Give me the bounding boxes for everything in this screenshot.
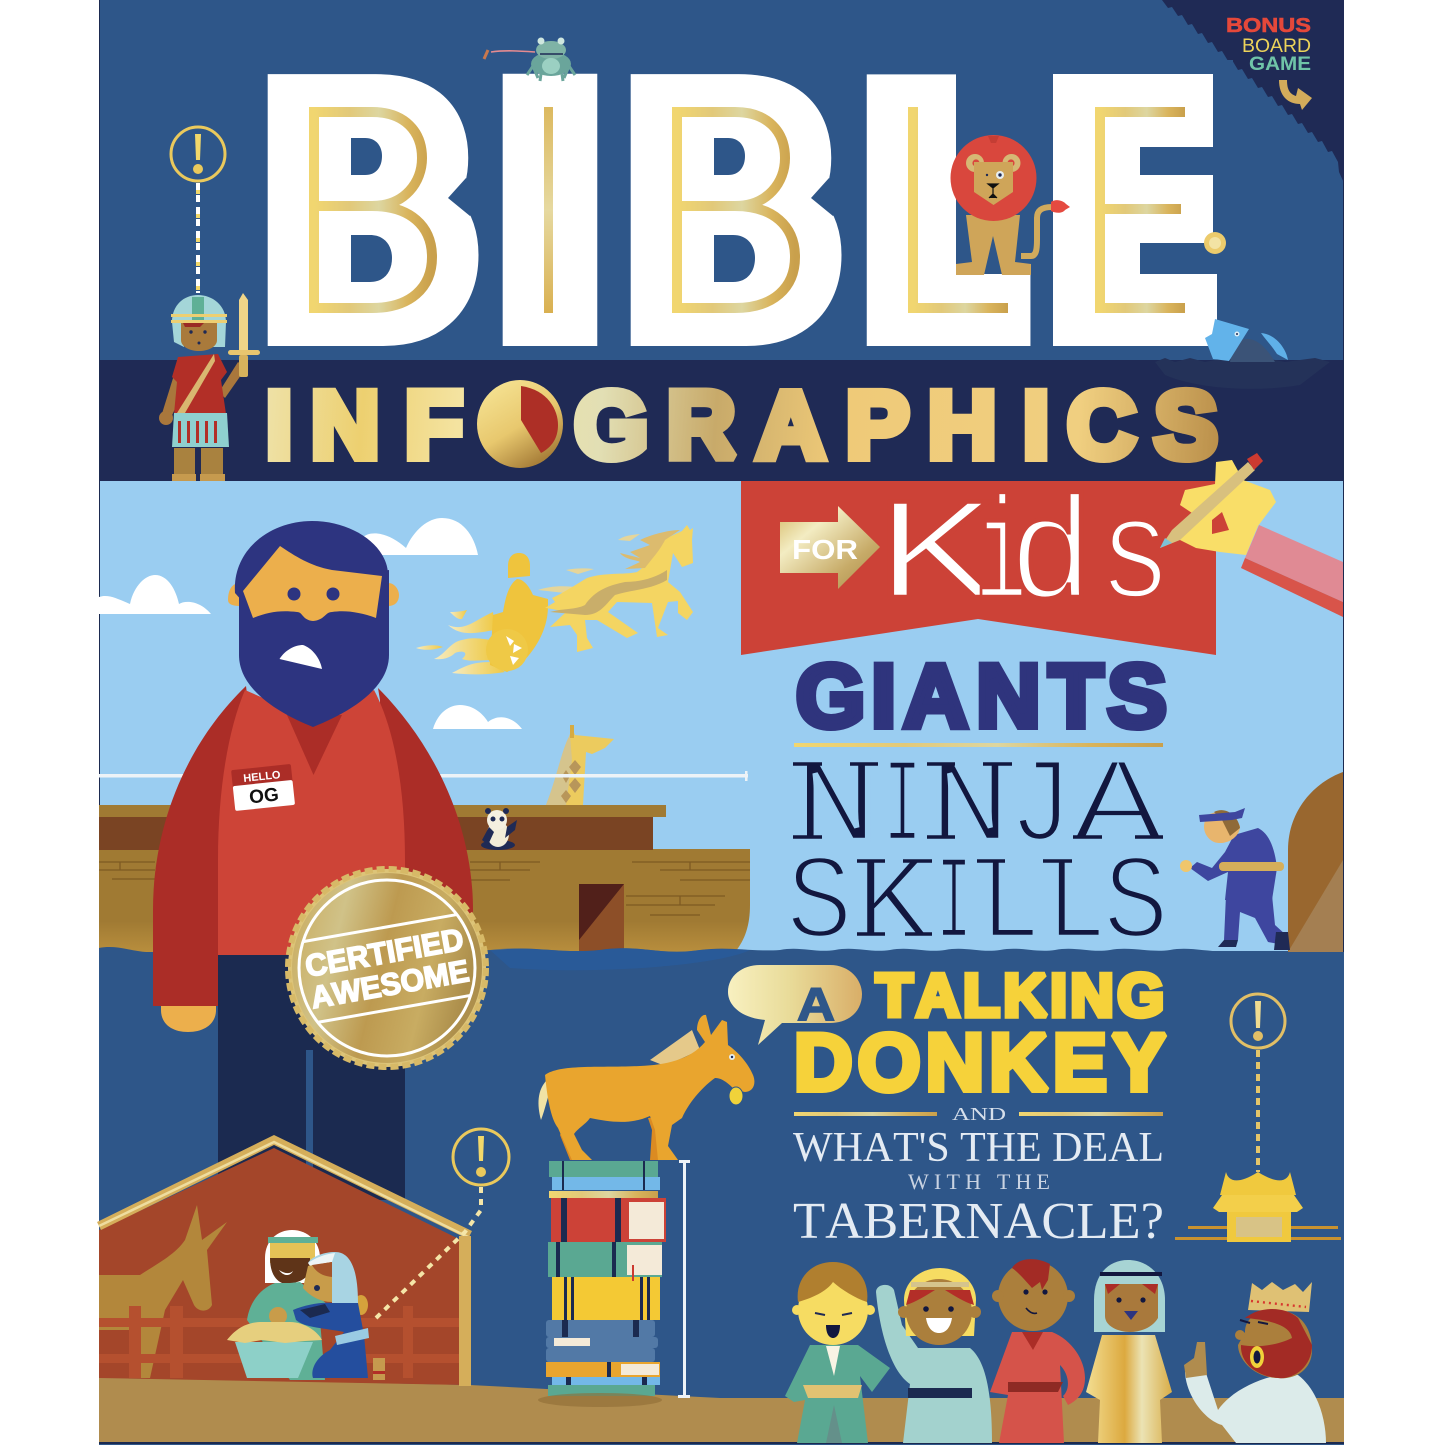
ninja running [1180,808,1290,950]
badge: certified awesome: AWESOME [308,953,472,1015]
corner flash: bonus board game: GAME [1249,54,1311,75]
clouds [99,518,522,729]
skills letters: I [936,837,972,974]
skills letters [786,837,1169,974]
ark of the covenant with alert pin [1175,994,1341,1242]
title: BIBLE: I [506,29,594,390]
skills letters: S [786,837,853,974]
text: with the: WITH THE [908,1169,1050,1194]
title: BIBLE: B [277,39,464,380]
ninja letters [793,740,1164,877]
kids wordmark: i [975,476,1027,641]
ninja letters: N [793,740,879,877]
for arrow [780,506,880,589]
skills letters: S [1103,837,1169,974]
heading: talking: TALKING [876,962,1164,1029]
ninja letters: N [928,740,1012,877]
title: BIBLE: B [640,39,827,380]
fish in water [1155,319,1330,389]
speech bubble with letter A [728,965,862,1045]
kids wordmark: d [1008,476,1094,641]
divider: gold rule [794,743,1163,747]
title: BIBLE [277,29,1204,390]
ark [99,805,750,952]
flaming chariot and horse [416,525,693,674]
name tag: hello og [231,764,295,811]
ninja letters: J [1008,740,1074,877]
title: BIBLE: L [887,62,1004,357]
subtitle: INFOGRAPHICS [266,372,1218,478]
title: BIBLE: E [1068,54,1204,365]
subtitle: INFOGRAPHICS: GRAPHICS [574,372,1218,478]
ground [99,1377,1344,1444]
text: what's the deal: WHAT'S THE DEAL [793,1125,1164,1171]
corner flash: bonus board game: BONUS [1226,15,1311,37]
character: Og the giant [153,521,473,1200]
character: gold robed kid [1086,1260,1172,1443]
height marker [678,1160,690,1398]
frog with tongue and fly [484,38,575,81]
badge: certified awesome: CERTIFIED [302,922,466,984]
character: king [1184,1282,1326,1443]
chariot flames [416,610,505,674]
skills letters: L [979,837,1041,974]
alert pin and dotted line, nativity [376,1129,509,1318]
pie chart letter O [477,380,563,468]
panda [481,808,517,850]
talking donkey [539,1015,754,1160]
subtitle: and with rules: AND [952,1104,1006,1124]
title letter counters and gaps [351,60,1233,346]
text: tabernacle: TABERNACLE? [793,1193,1164,1250]
stack of books [538,1161,666,1407]
skills letters: K [855,837,930,974]
ninja letters: A [1072,740,1164,877]
subtitle: INFOGRAPHICS: INF [266,372,463,478]
speech bubble with letter A: A [797,978,835,1030]
hand with pencil [1160,453,1343,617]
badge: certified awesome [288,869,486,1067]
name tag: hello og: OG [248,784,280,808]
stable donkey silhouette [99,1205,227,1378]
cave [1288,772,1343,952]
soldier illustration [159,293,260,481]
kids wordmark: s [1098,476,1172,641]
ninja letters: I [883,740,922,877]
kids wordmark [875,476,1172,641]
subtitle: and with rules [794,1104,1163,1124]
water [99,947,1344,1445]
character: red kid [990,1259,1085,1443]
corner flash: bonus board game [1162,0,1344,183]
giraffe [546,725,614,805]
for arrow: FOR [792,534,858,565]
title gold inline [314,107,1185,313]
Joseph, Mary and manger [227,1230,385,1380]
icon: alert pin and dashed line, soldier [171,127,225,293]
corner flash: bonus board game: BOARD [1242,36,1311,57]
banner: for kids [741,476,1216,655]
name tag: hello og: HELLO [243,769,282,785]
heading: skills [786,837,1169,974]
gold ring on E [1204,232,1226,254]
heading: giants: GIANTS [796,646,1167,746]
kids wordmark: K [875,476,996,641]
character: aqua kid waving [876,1268,992,1443]
heading: ninja [793,740,1164,877]
lion [950,135,1070,275]
character: green kid [785,1262,890,1443]
skills letters: L [1045,837,1107,974]
horizon measuring line [99,771,748,781]
nativity stable [99,1140,471,1386]
heading: donkey: DONKEY [794,1018,1166,1108]
